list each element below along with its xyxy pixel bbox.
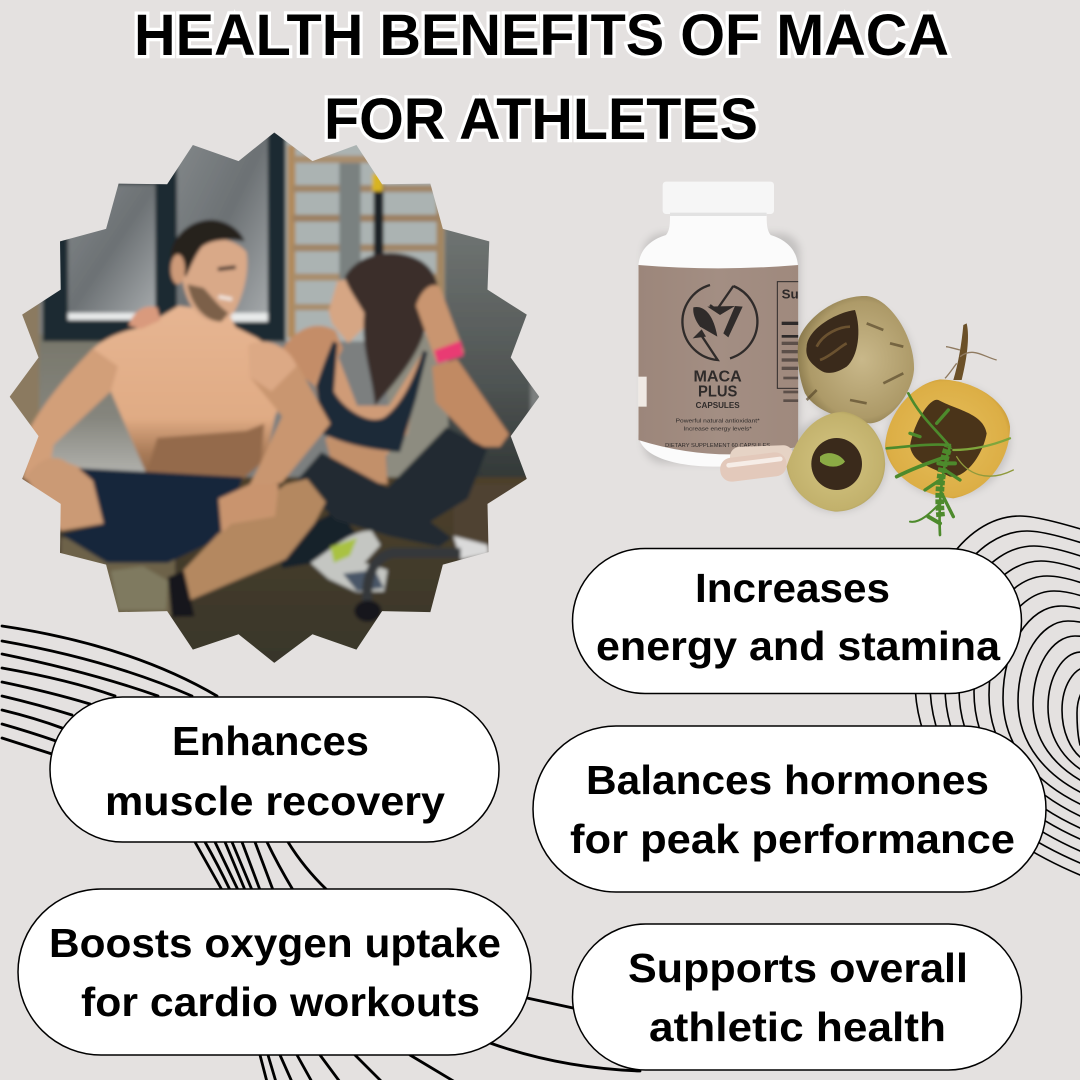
soft product shadow [643,233,1010,512]
maca sprout leaves [887,393,1013,535]
bottle logo [682,285,757,360]
gym background [0,120,557,677]
title: FOR ATHLETES [324,87,758,152]
maca root: bottom [787,412,885,512]
photo: athletes in starburst frame [0,120,557,677]
pill: enhances muscle recovery: muscle recovery [105,778,445,824]
pill: balances hormones: Balances hormones [586,757,989,803]
pill: increases energy and stamina: Increases [695,565,890,611]
capsules [719,445,794,483]
bottle text [665,368,770,449]
maca root: yellow with sprout [885,323,1010,498]
bottle text: DIETARY SUPPLEMENT 60 CAPSULES [665,443,770,449]
product: Maca Plus bottle with capsules and maca roots [638,182,1013,535]
decorative contour lines: left and bottom [2,626,640,1080]
title [134,3,949,152]
pill: supports athletic health [572,924,1022,1070]
pill: balances hormones: for peak performance [570,816,1015,862]
bottle text: MACA [693,368,742,385]
woman [279,253,509,622]
bottle label [638,265,798,454]
pill: increases energy and stamina [572,548,1022,694]
bottle label: Sup [782,286,807,301]
pill: enhances muscle recovery: Enhances [172,718,369,764]
pill: enhances muscle recovery [50,697,499,842]
maca root: top [798,296,914,423]
pill: balances hormones [533,726,1046,892]
bottle text: PLUS [698,384,737,401]
bottle text: CAPSULES [696,401,740,410]
pill: supports athletic health: Supports overall [628,945,968,991]
title: HEALTH BENEFITS OF MACA [134,3,949,68]
pill: boosts oxygen uptake: Boosts oxygen uptake [49,920,501,966]
bottle text: Increase energy levels* [683,426,753,432]
pill: supports athletic health: athletic health [649,1004,946,1050]
decorative contour lines: right [915,516,1080,891]
bottle text: Powerful natural antioxidant* [676,418,761,424]
pill: boosts oxygen uptake [18,889,531,1055]
pill: increases energy and stamina: energy and stamina [596,623,1001,669]
man [23,220,330,617]
pill: boosts oxygen uptake: for cardio workouts [81,979,480,1025]
bottle [638,182,807,467]
